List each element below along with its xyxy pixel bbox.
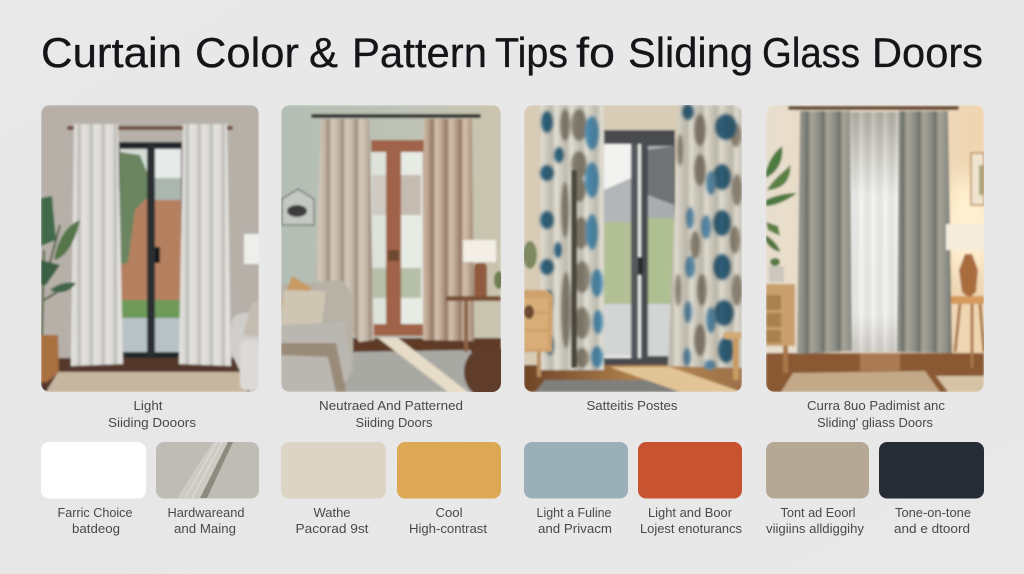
swatch label 3 bbox=[296, 506, 369, 536]
caption: panel 2 bbox=[319, 399, 463, 430]
caption: panel 3: Satteitis Postes bbox=[586, 399, 678, 413]
swatch label 3: Pacorad 9st bbox=[296, 522, 369, 536]
title: Sliding bbox=[628, 29, 753, 76]
table lamp bbox=[946, 224, 984, 368]
swatch label 6: Light and Boor bbox=[648, 506, 732, 520]
swatch label 5: Light a Fuline bbox=[536, 506, 612, 520]
floor and rug bbox=[524, 365, 742, 392]
framed picture bbox=[282, 189, 314, 225]
swatch label 8 bbox=[894, 506, 971, 536]
swatch: ochre bbox=[397, 442, 501, 498]
caption: panel 4: Curra 8uo Padimist anc bbox=[807, 399, 945, 413]
swatch label 8: Tone-on-tone bbox=[895, 506, 971, 520]
caption: panel 2: Siiding Doors bbox=[356, 416, 432, 430]
right patterned curtain bbox=[668, 104, 742, 370]
caption: panel 1 bbox=[108, 399, 196, 430]
swatch: cream bbox=[281, 442, 386, 498]
title: Color bbox=[195, 29, 299, 76]
rod bbox=[67, 126, 233, 130]
rod bbox=[311, 114, 481, 118]
small side table bbox=[723, 332, 742, 380]
table lamp bbox=[446, 240, 504, 352]
swatch label 4: High-contrast bbox=[409, 522, 488, 536]
left curtain bbox=[316, 119, 374, 342]
title: Doors bbox=[872, 29, 983, 76]
wall bbox=[41, 105, 259, 360]
swatch label 6 bbox=[640, 506, 742, 536]
swatch label 4: Cool bbox=[436, 506, 462, 520]
left grey curtain bbox=[797, 111, 852, 354]
swatch label 1 bbox=[58, 506, 133, 536]
lamp shade bbox=[244, 234, 259, 264]
swatch label 1: Farric Choice bbox=[58, 506, 133, 520]
swatch label 5 bbox=[536, 506, 612, 536]
swatch: navy bbox=[879, 442, 984, 498]
right curtain bbox=[179, 124, 231, 366]
swatch label 5: and Privacm bbox=[538, 522, 612, 536]
title: Glass bbox=[762, 29, 860, 76]
caption: panel 4 bbox=[807, 399, 945, 430]
swatch label 7 bbox=[766, 506, 865, 536]
right curtain bbox=[423, 119, 474, 341]
swatch label 7: viigiins alldiggihy bbox=[766, 522, 865, 536]
wall bbox=[766, 105, 984, 355]
swatch label 2 bbox=[168, 506, 245, 536]
caption: panel 1: Siiding Dooors bbox=[108, 416, 196, 430]
panel: grey and sheer curtains photo bbox=[766, 105, 994, 392]
floor and rug bbox=[41, 358, 259, 392]
left curtain bbox=[71, 124, 123, 366]
title: Tips bbox=[495, 29, 568, 76]
wall bbox=[524, 105, 680, 367]
swatch label 6: Lojest enoturancs bbox=[640, 522, 742, 536]
rod bbox=[788, 106, 959, 110]
swatch: moulding bbox=[156, 442, 259, 498]
swatch label 1: batdeog bbox=[72, 522, 120, 536]
right grey curtain bbox=[897, 111, 952, 353]
swatch: white bbox=[41, 442, 146, 498]
wooden cabinet bbox=[766, 284, 795, 373]
swatch: rust bbox=[638, 442, 742, 498]
framed picture bbox=[971, 153, 984, 205]
plant bbox=[41, 196, 80, 382]
swatch: dusty blue bbox=[524, 442, 628, 498]
small plant bbox=[523, 241, 537, 269]
panel: patterned curtains photo bbox=[523, 104, 742, 392]
floor and rug bbox=[766, 353, 984, 392]
title: Pattern bbox=[352, 29, 487, 76]
title: fo bbox=[576, 29, 615, 76]
caption: panel 4: Sliding' gliass Doors bbox=[817, 416, 933, 430]
swatch label 8: and e dtoord bbox=[894, 522, 970, 536]
sofa bbox=[281, 276, 353, 392]
sliding door bbox=[603, 130, 675, 365]
swatch label 7: Tont ad Eoorl bbox=[780, 506, 856, 520]
sofa bbox=[231, 301, 259, 392]
leather ottoman bbox=[462, 348, 501, 392]
plant bbox=[766, 146, 797, 282]
title bbox=[41, 29, 983, 76]
left patterned curtain bbox=[540, 105, 604, 370]
swatch label 3: Wathe bbox=[314, 506, 351, 520]
panel: neutral curtains photo bbox=[281, 105, 514, 399]
sliding door bbox=[119, 142, 182, 358]
caption: panel 1: Light bbox=[134, 399, 163, 413]
panel: light curtains photo bbox=[41, 105, 259, 392]
floor and rug bbox=[344, 336, 501, 392]
swatch label 2: Hardwareand bbox=[168, 506, 245, 520]
wood door bbox=[371, 140, 424, 336]
sheer curtain bbox=[849, 112, 899, 352]
title: Curtain bbox=[41, 29, 182, 76]
swatch: taupe bbox=[766, 442, 869, 498]
title: & bbox=[309, 29, 338, 76]
swatch label 2: and Maing bbox=[174, 522, 236, 536]
wall bbox=[281, 105, 501, 340]
swatch label 4 bbox=[409, 506, 488, 536]
wooden cabinet bbox=[524, 290, 553, 377]
caption: panel 2: Neutraed And Patterned bbox=[319, 399, 463, 413]
lamp glow bbox=[949, 172, 984, 276]
